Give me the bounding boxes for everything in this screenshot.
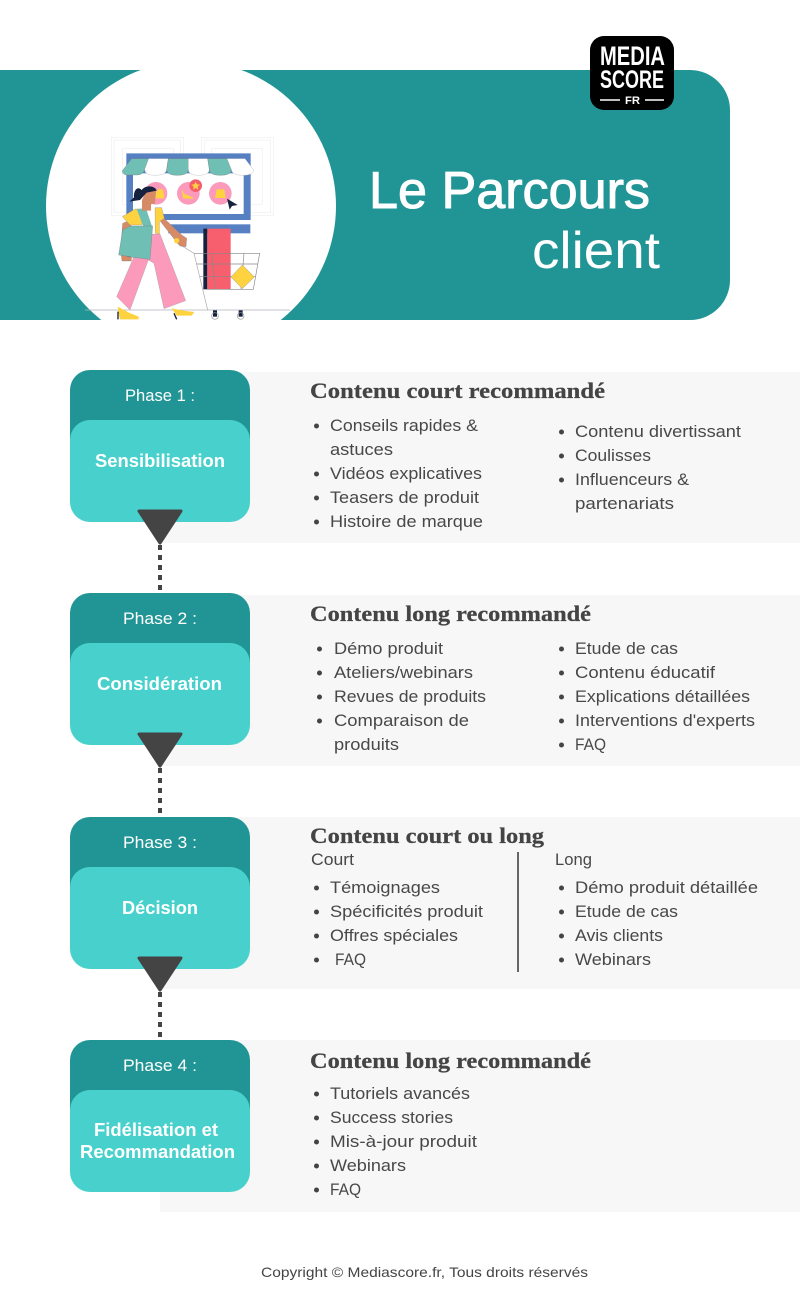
list: court: Offres spéciales [330,927,458,945]
list: phase 4: Success stories [330,1109,453,1127]
panel: phase 2 content [160,595,800,766]
list: phase 2 right: Contenu éducatif [575,664,715,682]
phase 4 card: Recommandation [80,1142,235,1162]
logo: Mediascore FR: SCORE [600,66,664,94]
list: phase 4 [314,1085,477,1199]
list: phase 4: Mis-à-jour produit [330,1133,477,1151]
phase 2 card: Considération [97,674,222,694]
list: phase 2 right: Etude de cas [575,640,678,658]
list: phase 4: Tutoriels avancés [330,1085,470,1103]
illustration: shopper with cart [85,137,290,319]
heading: phase 1: Contenu court recommandé [310,378,605,403]
list: court: Spécificités produit [330,903,483,921]
phase 3 card: Décision [122,898,198,918]
panel: phase 1 content [160,372,800,543]
phase 4 card: Fidélisation et [94,1120,218,1140]
list: phase 4: Webinars [330,1157,406,1175]
list: phase 1 left [314,417,483,531]
list: phase 2 left: Comparaison de [334,712,469,730]
heading: phase 2: Contenu long recommandé [310,601,591,626]
list: phase 2 left: Démo produit [334,640,443,658]
phase 4 card: Phase 4 : [123,1056,197,1075]
heading: phase 4: Contenu long recommandé [310,1048,591,1073]
list: long: Démo produit détaillée [575,879,758,897]
list: phase 2 right: FAQ [575,736,606,754]
title: Le Parcours [369,162,650,220]
list: long: Etude de cas [575,903,678,921]
logo: Mediascore FR: FR [625,95,640,107]
list: court: FAQ [335,951,366,969]
title: client [532,222,661,280]
list: phase 2 right: Explications détaillées [575,688,750,706]
logo: Mediascore FR [590,36,674,110]
arrow: phase 3 to 4 [139,958,181,1040]
list: phase 2 left: Revues de produits [334,688,486,706]
arrow: phase 1 to 2 [139,511,181,593]
panel: phase 4 content [160,1040,800,1212]
woman [117,186,194,319]
list: long: Long [555,851,592,869]
list: phase 1 right: Contenu divertissant [575,423,741,441]
list: phase 1 right: partenariats [575,495,674,513]
list: phase 2 right: Interventions d'experts [575,712,755,730]
list: phase 4: FAQ [330,1181,361,1199]
phase 2 card [70,593,250,745]
list: phase 1 left: Vidéos explicatives [330,465,482,483]
list: phase 1 left: astuces [330,441,393,459]
list: court: Témoignages [330,879,440,897]
phase 1 card [70,370,250,522]
arrow: phase 2 to 3 [139,734,181,817]
copyright footer: Copyright © Mediascore.fr, Tous droits réservés [261,1264,588,1280]
phase 3 card: Phase 3 : [123,833,197,852]
list: phase 2 right [559,640,755,754]
panel: phase 3 content [160,817,800,989]
list: phase 1 right: Influenceurs & [575,471,689,489]
header white circle [46,70,336,320]
title [369,162,661,280]
list: long [555,851,758,969]
list: court [311,851,483,969]
cart contents and frame [175,229,260,319]
list: long: Webinars [575,951,651,969]
list: phase 2 left: Ateliers/webinars [334,664,473,682]
list: phase 1 left: Teasers de produit [330,489,479,507]
list: phase 1 right: Coulisses [575,447,651,465]
list: phase 1 left: Conseils rapides & [330,417,478,435]
phase 1 card: Sensibilisation [95,451,225,471]
list: phase 2 left: produits [334,736,399,754]
heading: phase 3: Contenu court ou long [310,823,544,848]
list: phase 2 left [317,640,486,754]
list: phase 1 right [559,423,741,513]
phase 2 card: Phase 2 : [123,609,197,628]
list: long: Avis clients [575,927,663,945]
logo: Mediascore FR: MEDIA [600,41,665,71]
list: phase 1 left: Histoire de marque [330,513,483,531]
phase 1 card: Phase 1 : [125,386,195,405]
phase 4 card [70,1040,250,1192]
list: court: Court [311,851,354,869]
phase 3 card [70,817,250,969]
header banner [0,70,730,320]
